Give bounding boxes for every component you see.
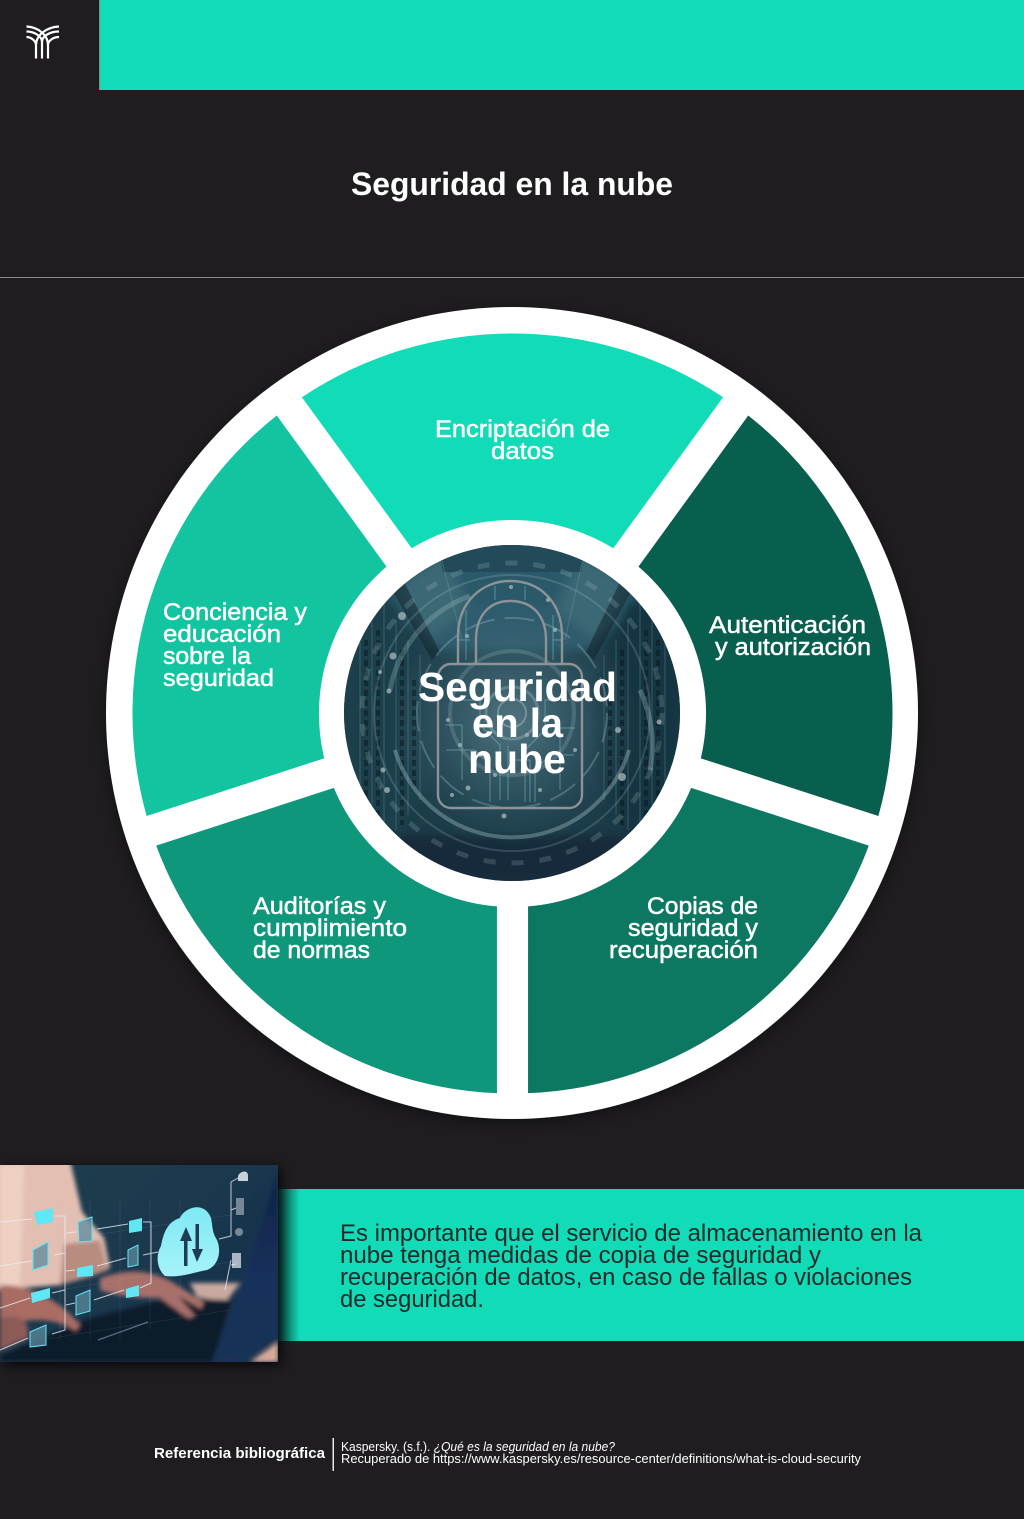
segment: Autenticación y autorización — [605, 396, 939, 863]
label: Auditorías y cumplimiento de normas: Auditorías y — [253, 893, 386, 920]
label: Conciencia y educación sobre la seguridad: Conciencia y — [163, 599, 307, 626]
label: Conciencia y educación sobre la seguridad: educación — [163, 621, 281, 648]
note text — [340, 1220, 923, 1313]
note text: Es importante que el servicio de almacenamiento en la — [340, 1220, 923, 1247]
documents — [30, 1217, 138, 1347]
note band — [278, 1189, 1024, 1341]
desk — [190, 1283, 240, 1302]
label: Conciencia y educación sobre la seguridad: sobre la — [163, 643, 252, 670]
reference separator — [332, 1438, 334, 1471]
header band — [99, 0, 1024, 90]
segment: Copias de seguridad y recuperación — [439, 723, 906, 1145]
center label — [418, 664, 617, 782]
photo: hands typing with cloud file icons — [0, 1160, 278, 1362]
segment: Conciencia y educación sobre la seguridad — [86, 396, 420, 863]
note text: nube tenga medidas de copia de seguridad y — [340, 1242, 821, 1269]
divider — [0, 277, 1024, 278]
segment: Encriptación de datos — [302, 334, 723, 548]
title: Seguridad en la nube — [351, 166, 673, 202]
padlock outline — [438, 581, 582, 808]
laptop lid — [212, 1170, 278, 1362]
reference text: Recuperado de https://www.kaspersky.es/resource-center/definitions/what-is-cloud-security — [341, 1452, 862, 1466]
segment: Auditorías y cumplimiento de normas — [119, 723, 586, 1145]
label: Conciencia y educación sobre la seguridad: seguridad — [163, 665, 274, 692]
connector lines — [0, 1178, 238, 1350]
reference text — [341, 1440, 862, 1466]
label: Autenticación y autorización — [709, 612, 871, 661]
icon: logo — [26, 26, 59, 58]
note text: recuperación de datos, en caso de fallas o violaciones — [340, 1264, 912, 1291]
folders — [31, 1208, 142, 1303]
label: Auditorías y cumplimiento de normas: cumplimiento — [253, 915, 407, 942]
label: Copias de seguridad y recuperación — [609, 893, 758, 964]
hands — [0, 1285, 80, 1331]
white disc — [106, 307, 918, 1119]
label: Encriptación de datos: Encriptación de — [435, 416, 610, 443]
side icons — [232, 1171, 248, 1268]
reference text: Kaspersky. (s.f.). ¿Qué es la seguridad en la nube? — [341, 1440, 615, 1454]
center label: Seguridad — [418, 664, 617, 710]
label: Encriptación de datos — [435, 416, 610, 465]
label: Autenticación y autorización: Autenticación — [709, 612, 866, 639]
center label: nube — [468, 736, 566, 782]
shirt — [0, 1160, 110, 1290]
keyboard and laptop base — [0, 1298, 232, 1362]
label: Conciencia y educación sobre la seguridad — [163, 599, 307, 692]
label: Copias de seguridad y recuperación: recuperación — [609, 937, 758, 964]
note text: de seguridad. — [340, 1286, 484, 1313]
label: Encriptación de datos: datos — [491, 438, 554, 465]
label: Autenticación y autorización: y autorización — [715, 634, 871, 661]
reference heading: Referencia bibliográfica — [154, 1445, 326, 1462]
center label: en la — [472, 700, 564, 746]
label: Auditorías y cumplimiento de normas — [253, 893, 407, 964]
wheel diagram — [86, 307, 939, 1145]
label: Auditorías y cumplimiento de normas: de normas — [253, 937, 370, 964]
label: Copias de seguridad y recuperación: Copias de — [647, 893, 758, 920]
center image: digital padlock in a data center — [340, 540, 685, 885]
label: Copias de seguridad y recuperación: seguridad y — [628, 915, 758, 942]
cloud icon — [158, 1207, 219, 1276]
cloud arrows — [180, 1224, 203, 1266]
keyboard streak — [98, 1322, 148, 1340]
